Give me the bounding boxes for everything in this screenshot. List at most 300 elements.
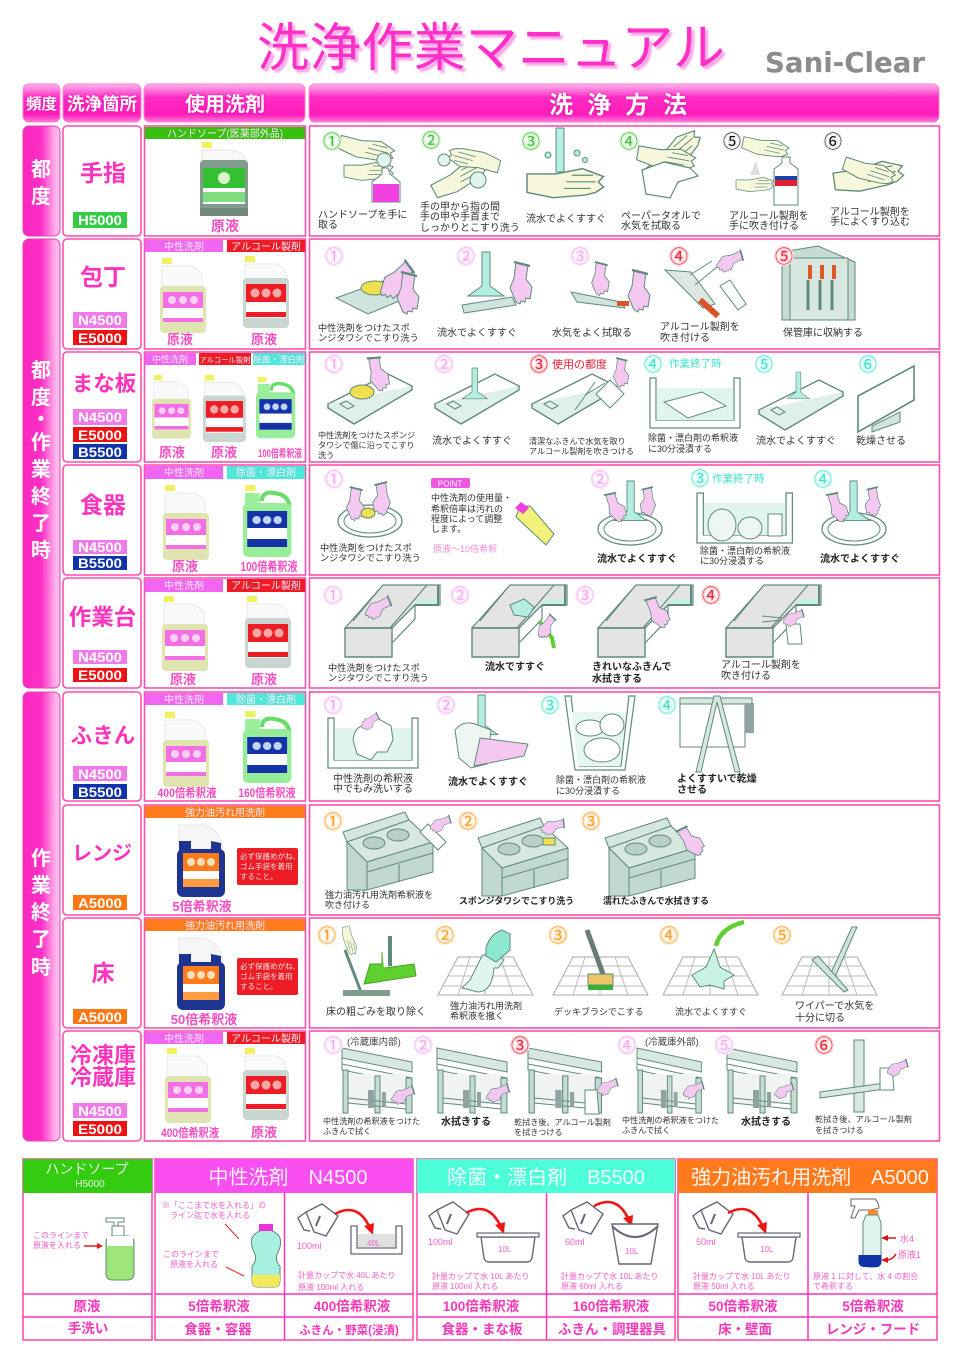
- header: frequency: [23, 84, 60, 122]
- step 4: paper towel: ペーパータオルで: [621, 210, 701, 222]
- step 1: (冷蔵庫内部): [347, 1036, 401, 1048]
- point note: します。: [431, 524, 466, 534]
- dilution table: heavy-duty degreaser A5000: 5倍希釈液: [842, 1298, 904, 1314]
- detergents: [145, 693, 305, 800]
- step 5: 水拭きする: [741, 1115, 791, 1128]
- step 2: [451, 585, 567, 673]
- soap pump bottle diagram: このラインまで: [33, 1231, 89, 1240]
- detergent with warning: 5倍希釈液: [172, 899, 232, 914]
- product tag: A5000: [78, 1009, 122, 1025]
- step 2: ②: [451, 586, 469, 606]
- panel: dish cloth: [63, 692, 940, 801]
- 50x measuring diagram: 計量カップで水 10L あたり: [693, 1271, 790, 1281]
- step 5: [775, 246, 863, 339]
- product tags: B5500: [78, 555, 122, 571]
- step 3: 使用の都度: [552, 358, 607, 371]
- panel: work table: [63, 578, 940, 688]
- step 3: ③: [541, 696, 559, 716]
- step 1: 中性洗剤の希釈液: [333, 772, 413, 785]
- step 1: ンジタワシでこすり洗う: [328, 672, 429, 683]
- detergent: hand soap: [145, 127, 305, 234]
- panel: tableware: [63, 465, 940, 575]
- step 3: rinse: [522, 128, 606, 225]
- spray bottle diagram: 水4: [900, 1233, 914, 1244]
- detergent with warning: [145, 806, 305, 914]
- detergent with warning: すること。: [240, 982, 278, 991]
- point note: POINT: [438, 480, 462, 488]
- step 3: に30分浸漬する: [700, 555, 764, 566]
- header: cleaning method: 洗浄方法: [549, 92, 687, 119]
- step 3: 除菌・漂白剤の希釈液: [700, 545, 790, 556]
- product tags: N4500: [78, 312, 122, 328]
- location label: 床: [92, 960, 114, 986]
- step 5: 十分に切る: [795, 1011, 845, 1024]
- product tags: N4500: [78, 766, 122, 782]
- title: 洗浄作業マニュアル: [257, 20, 725, 78]
- step 4: [814, 470, 900, 565]
- step 4: 流水でよくすすぐ: [820, 552, 900, 565]
- detergents: [145, 579, 305, 687]
- step 3: デッキブラシでこする: [554, 1006, 644, 1017]
- panel: hands and fingers: [63, 126, 940, 236]
- step 3: ③: [549, 926, 567, 946]
- step 4: 流水でよくすすぐ: [675, 1006, 747, 1017]
- product tag: H5000: H5000: [78, 212, 122, 228]
- 400x measuring diagram: 計量カップで水 40L あたり: [298, 1270, 396, 1280]
- 160x measuring diagram: [561, 1202, 658, 1291]
- detergents: 原液: [170, 672, 196, 687]
- step 3: 水気をよく拭取る: [552, 326, 632, 339]
- frequency band: every time and end of work: 時: [31, 539, 51, 562]
- step 4: 中性洗剤の希釈液をつけた: [622, 1115, 719, 1125]
- 160x measuring diagram: 60ml: [565, 1237, 585, 1247]
- step 2: scrub hands: 手の甲や手首まで: [420, 210, 500, 223]
- step 4: に30分浸漬する: [648, 443, 712, 454]
- step 4: ④: [660, 926, 678, 946]
- section header: [23, 1159, 152, 1193]
- step 3: [582, 812, 709, 906]
- step 2: ②: [457, 247, 475, 267]
- step 1: take soap: ①: [323, 132, 341, 152]
- step 1: [318, 354, 415, 460]
- frequency band: every time: 都: [31, 158, 51, 181]
- step 6: ⑥: [859, 355, 877, 375]
- 160x measuring diagram: 10L: [625, 1247, 639, 1256]
- frequency band: every time: 度: [31, 185, 51, 208]
- detergent with warning: 強力油汚れ用洗剤: [185, 919, 265, 932]
- detergents: 原液: [251, 1125, 277, 1140]
- detergents: 中性洗剤: [164, 1032, 204, 1045]
- step 4: [644, 355, 740, 454]
- dilution table: sanitizing bleach B5500: [417, 1159, 675, 1340]
- step 5: ⑤: [775, 247, 793, 267]
- product tags: N4500: [78, 649, 122, 665]
- step 4: [658, 696, 757, 796]
- step 2: [437, 247, 532, 339]
- step 6: rub in: アルコール製剤を: [830, 205, 910, 218]
- step 2: [591, 470, 677, 565]
- step 1: take soap: [318, 132, 407, 231]
- step 3: ③: [691, 469, 709, 489]
- detergent with warning: ゴム手袋を着用: [240, 971, 292, 981]
- detergents: アルコール製剤: [231, 1032, 301, 1045]
- spray bottle diagram: [813, 1199, 921, 1291]
- location label: 包丁: [80, 264, 126, 290]
- logo: Sani-Clear: Sani-Clear: [765, 46, 925, 79]
- header: detergent: 使用洗剤: [185, 93, 265, 116]
- step 2: ②: [436, 926, 454, 946]
- soap pump bottle diagram: [33, 1218, 134, 1280]
- step 2: scrub hands: 手の甲から指の間: [420, 200, 500, 213]
- step 3: ③: [582, 812, 600, 832]
- step 1: [324, 812, 454, 910]
- divider: [807, 1193, 809, 1340]
- product tags: N4500: [78, 409, 122, 425]
- dilution table: neutral detergent N4500: ふきん・野菜(浸漬): [299, 1323, 399, 1337]
- detergent: hand soap: 原液: [211, 218, 239, 234]
- step 4: [660, 247, 746, 344]
- step 1: タワシで傷に沿ってこすり: [318, 440, 415, 450]
- step 2: [436, 926, 533, 1021]
- location label: 食器: [80, 492, 126, 518]
- 50x measuring diagram: 原液 50ml 入れる: [693, 1282, 755, 1291]
- step 4: アルコール製剤を: [660, 320, 740, 333]
- product tags: E5000: [78, 330, 122, 346]
- detergents: 原液: [167, 332, 193, 347]
- 400x measuring diagram: 原液 100ml 入れる: [298, 1283, 364, 1292]
- 100x measuring diagram: 原液 100ml 入れる: [432, 1282, 498, 1291]
- step 3: 濡れたふきんで水拭きする: [603, 895, 709, 906]
- step 1: ①: [318, 926, 336, 946]
- detergents: 中性洗剤: [164, 466, 204, 479]
- frequency band: end of work: 時: [31, 956, 51, 979]
- step 6: ⑥: [815, 1036, 833, 1056]
- step 6: を拭きつける: [815, 1125, 864, 1135]
- detergents: 除菌・漂白剤: [236, 466, 296, 479]
- product tags: B5500: [78, 784, 122, 800]
- detergent with warning: 必ず保護めがね、: [240, 961, 300, 971]
- step 5: ワイパーで水気を: [795, 999, 874, 1012]
- step 3: を拭きつける: [514, 1127, 563, 1137]
- product tags: B5500: [78, 444, 122, 460]
- step 4: アルコール製剤を: [721, 658, 801, 671]
- detergents: [145, 466, 305, 574]
- frequency band: every time and end of work: 度: [31, 386, 51, 409]
- panel: kitchen knife: [63, 239, 940, 349]
- step 1: [324, 696, 418, 795]
- detergents: 原液: [251, 672, 277, 687]
- detergents: 400倍希釈液: [161, 1125, 219, 1140]
- 160x measuring diagram: 計量カップで水 10L あたり: [561, 1271, 658, 1281]
- detergent with warning: [145, 919, 305, 1027]
- step 5: ⑤: [755, 355, 773, 375]
- 160x measuring diagram: 原液 60ml 入れる: [561, 1282, 623, 1291]
- step 6: rub in: ⑥: [824, 132, 842, 152]
- 100x measuring diagram: 100ml: [428, 1237, 453, 1247]
- step 4: 作業終了時: [669, 357, 722, 370]
- location label: ふきん: [71, 724, 135, 748]
- 5x bottle diagram: ※「ここまで水を入れる」の: [162, 1200, 266, 1210]
- step 1: ①: [325, 470, 343, 490]
- step 1: 中性洗剤の希釈液をつけた: [323, 1116, 420, 1126]
- step 3: [541, 696, 646, 796]
- step 4: 除菌・漂白剤の希釈液: [648, 432, 738, 443]
- product tags: [73, 539, 127, 571]
- step 1: take soap: 取る: [318, 219, 338, 231]
- dilution table: sanitizing bleach B5500: ふきん・調理器具: [558, 1322, 666, 1337]
- table header row: [23, 84, 939, 122]
- dilution labels: 100倍希釈液: [443, 1298, 520, 1314]
- step 2: 希釈液を撒く: [450, 1010, 504, 1021]
- header: cleaning method: [309, 84, 939, 122]
- step 4: [618, 1036, 719, 1135]
- step 3: [549, 926, 648, 1017]
- step 4: paper towel: ④: [620, 132, 638, 152]
- product tags: E5000: [78, 667, 122, 683]
- step 3: [691, 469, 792, 566]
- step 6: 乾燥させる: [856, 434, 906, 447]
- step 4: [660, 922, 758, 1017]
- frequency band: every time and end of work: 都: [31, 359, 51, 382]
- dilution labels: 5倍希釈液: [188, 1298, 250, 1314]
- step 3: [511, 1036, 621, 1137]
- detergent with warning: 必ず保護めがね、: [240, 851, 300, 861]
- step 3: 水拭きする: [592, 672, 642, 685]
- step 5: [755, 355, 843, 447]
- step 4: ④: [702, 586, 720, 606]
- step 1: ①: [324, 812, 342, 832]
- step 2: 流水でよくすすぐ: [437, 327, 517, 339]
- dilution table: neutral detergent N4500: [155, 1159, 413, 1340]
- step 5: 保管庫に収納する: [783, 326, 863, 339]
- location label: 冷蔵庫: [70, 1065, 136, 1090]
- product tags: [73, 312, 127, 346]
- spray bottle diagram: 原液 1 に対して、水 4 の割合: [813, 1271, 918, 1281]
- frequency band: end of work: 終: [31, 901, 51, 924]
- product tag: A5000: [78, 895, 122, 911]
- detergents: 原液: [211, 445, 237, 460]
- step 6: rub in: 手によくすり込む: [830, 215, 910, 228]
- location label: 手指: [80, 160, 126, 186]
- step 1: ①: [325, 355, 343, 375]
- step 2: scrub hands: しっかりとこすり洗う: [420, 222, 520, 234]
- step 2: [459, 812, 574, 906]
- 100x measuring diagram: 計量カップで水 10L あたり: [432, 1271, 530, 1281]
- detergents: 除菌・漂白剤: [236, 693, 296, 706]
- step 2: scrub hands: [420, 131, 520, 234]
- frequency band: every time and end of work: 作: [31, 431, 51, 454]
- step 4: 吹き付ける: [660, 331, 710, 344]
- step 4: paper towel: [620, 126, 706, 232]
- usage label: 手洗い: [68, 1320, 108, 1336]
- step 2: ②: [437, 696, 455, 716]
- panel: cutting board: [63, 352, 940, 462]
- point note: 中性洗剤の使用量・: [431, 492, 512, 503]
- step 3: ③: [511, 1036, 529, 1056]
- 50x measuring diagram: [693, 1202, 800, 1291]
- header: cleaning location: [63, 84, 141, 122]
- step 4: ④: [814, 470, 832, 490]
- 400x measuring diagram: 100ml: [297, 1241, 322, 1251]
- step 4: させる: [677, 784, 707, 796]
- 5x bottle diagram: [162, 1200, 281, 1287]
- step 2: スポンジタワシでこすり洗う: [459, 895, 574, 906]
- panel: cooking range: [63, 805, 940, 915]
- dilution table: heavy-duty degreaser A5000: レンジ・フード: [826, 1322, 920, 1337]
- step 1: [324, 585, 440, 683]
- step 3: 清潔なふきんで水気を取り: [529, 436, 626, 446]
- header: frequency: 頻度: [26, 94, 57, 113]
- step 1: [318, 247, 419, 343]
- frequency band: end of work: 了: [31, 929, 51, 951]
- step 3: ③: [530, 355, 548, 375]
- 5x bottle diagram: このラインまで: [163, 1250, 219, 1259]
- step 3: に30分浸漬する: [556, 785, 620, 796]
- step 4: (冷蔵庫外部): [645, 1036, 699, 1048]
- step 2: ②: [459, 812, 477, 832]
- section header: [678, 1159, 937, 1193]
- usage labels: 食器・まな板: [442, 1321, 523, 1337]
- step 2: [432, 355, 519, 447]
- step 1: 中性洗剤をつけたスポ: [328, 662, 420, 673]
- detergents: [145, 353, 305, 460]
- soap pump bottle diagram: 原液を入れる: [33, 1241, 81, 1250]
- step 3: 乾拭き後、アルコール製剤: [514, 1117, 611, 1127]
- step 2: [437, 695, 528, 788]
- usage labels: 食器・容器: [184, 1321, 252, 1337]
- dilution labels: 50倍希釈液: [708, 1298, 778, 1314]
- detergents: アルコール製剤: [200, 356, 250, 364]
- step 5: [715, 1036, 797, 1128]
- step 2: 流水ですすぐ: [485, 660, 545, 673]
- frequency band: end of work: [23, 692, 60, 1141]
- step 3: rinse: 流水でよくすすぐ: [526, 213, 606, 225]
- step 1: [320, 470, 421, 563]
- point note: 希釈倍率は汚れの: [431, 503, 503, 514]
- step 1: ンジタワシでこすり洗う: [320, 552, 421, 563]
- step 1: 中性洗剤をつけたスポンジ: [318, 430, 415, 440]
- step 5: alcohol spray: アルコール製剤を: [729, 209, 809, 222]
- step 6: rub in: [824, 132, 910, 228]
- 100x measuring diagram: [428, 1202, 539, 1291]
- step 1: 洗う: [318, 450, 334, 460]
- section header: H5000: [75, 1179, 105, 1190]
- step 2: [414, 1036, 512, 1128]
- step 1: [318, 925, 426, 1018]
- step 1: 強力油汚れ用洗剤希釈液を: [325, 889, 433, 900]
- step 4: [702, 585, 821, 682]
- step 5: alcohol spray: ⑤: [723, 132, 741, 152]
- detergents: 中性洗剤: [164, 579, 204, 592]
- frequency band: every time and end of work: [23, 239, 60, 688]
- detergents: 原液: [172, 559, 198, 574]
- step 1: ①: [325, 247, 343, 267]
- detergents: 中性洗剤: [152, 354, 188, 364]
- point note: 原液〜10倍希釈: [433, 543, 497, 554]
- point note: 程度によって調整: [431, 513, 502, 524]
- dilution table: hand soap: [23, 1159, 152, 1340]
- step 1: ンジタワシでこすり洗う: [318, 332, 419, 343]
- step 2: ②: [435, 355, 453, 375]
- step 3: 作業終了時: [712, 472, 765, 485]
- step 4: ④: [670, 247, 688, 267]
- dilution label: 原液: [74, 1298, 101, 1314]
- 50x measuring diagram: 50ml: [696, 1237, 716, 1247]
- step 1: 中でもみ洗いする: [333, 782, 413, 795]
- step 5: alcohol spray: 手に吹き付ける: [729, 219, 799, 232]
- section header: 中性洗剤 N4500: [209, 1166, 367, 1189]
- step 6: [856, 355, 914, 447]
- detergent with warning: 強力油汚れ用洗剤: [185, 806, 265, 819]
- frequency band: every time and end of work: ・: [31, 409, 51, 431]
- detergent with warning: 50倍希釈液: [171, 1012, 237, 1027]
- spray bottle diagram: で希釈する: [813, 1281, 853, 1291]
- frequency band: every time and end of work: 業: [31, 458, 51, 481]
- panel: floor: [63, 918, 940, 1028]
- detergent with warning: すること。: [240, 872, 278, 881]
- detergents: 中性洗剤: [164, 693, 204, 706]
- step 1: ①: [324, 696, 342, 716]
- step 4: ④: [644, 355, 662, 375]
- step 3: [529, 355, 634, 456]
- step 3: rinse: ③: [522, 132, 540, 152]
- step 2: 流水でよくすすぐ: [448, 775, 528, 788]
- product tags: N4500: [78, 1103, 122, 1119]
- step 4: paper towel: 水気を拭取る: [621, 219, 681, 232]
- step 4: ④: [618, 1036, 636, 1056]
- detergents: 100倍希釈液: [240, 559, 298, 574]
- step 3: ③: [571, 247, 589, 267]
- spray bottle diagram: 原液1: [898, 1250, 921, 1260]
- step 1: 中性洗剤をつけたスポ: [318, 322, 410, 333]
- step 5: [773, 926, 877, 1024]
- detergents: 160倍希釈液: [238, 785, 296, 800]
- step 3: [576, 585, 693, 685]
- 5x bottle diagram: 原液を入れる: [170, 1260, 218, 1269]
- frequency band: end of work: 業: [31, 874, 51, 897]
- step 1: 床の粗ごみを取り除く: [326, 1005, 426, 1018]
- detergent: hand soap: ハンドソープ(医薬部外品): [167, 128, 283, 140]
- section header: [155, 1159, 413, 1193]
- product tags: [73, 766, 127, 800]
- step 2: 強力油汚れ用洗剤: [450, 1000, 522, 1011]
- product tags: [73, 1103, 127, 1137]
- detergents: 中性洗剤: [164, 240, 204, 253]
- step 3: 除菌・漂白剤の希釈液: [556, 774, 646, 785]
- location label: 作業台: [69, 605, 136, 630]
- step 2: ②: [591, 470, 609, 490]
- detergents: 原液: [251, 332, 277, 347]
- section header: 強力油汚れ用洗剤 A5000: [691, 1166, 929, 1189]
- step 2: 水拭きする: [441, 1115, 491, 1128]
- detergents: [145, 1032, 305, 1140]
- step 3: きれいなふきんで: [592, 661, 672, 673]
- dilution table: heavy-duty degreaser A5000: [678, 1159, 937, 1340]
- product tags: [73, 649, 127, 683]
- step 1: [323, 1036, 420, 1136]
- step 4: 吹き付ける: [721, 669, 771, 682]
- frequency band: every time and end of work: 了: [31, 513, 51, 535]
- step 5: ⑤: [715, 1036, 733, 1056]
- 400x measuring diagram: 40L: [367, 1239, 381, 1248]
- frequency band: every time: [23, 126, 60, 236]
- dilution table: neutral detergent N4500: 400倍希釈液: [314, 1298, 391, 1314]
- divider: [546, 1193, 548, 1340]
- frequency band: every time and end of work: 終: [31, 485, 51, 508]
- section header: [417, 1159, 675, 1193]
- detergents: 100倍希釈液: [258, 446, 302, 460]
- detergents: 除菌・漂白剤: [253, 354, 305, 364]
